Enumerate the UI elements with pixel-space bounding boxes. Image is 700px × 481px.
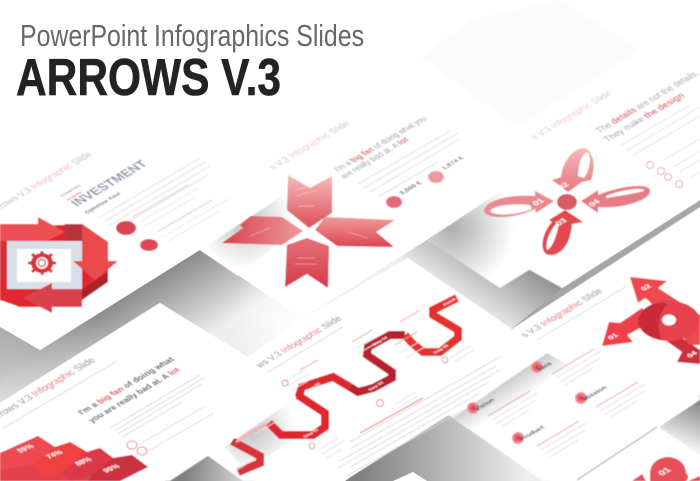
panel: investment slide bbox=[0, 95, 285, 350]
facet 74 bbox=[33, 442, 87, 478]
item: product: Product bbox=[518, 424, 547, 442]
step icons bbox=[282, 357, 448, 449]
panel: bottom right slide bbox=[575, 426, 700, 481]
ribbon: upper wave bbox=[405, 298, 458, 352]
statement text bbox=[331, 114, 429, 180]
step labels: Finish bbox=[442, 297, 458, 307]
background: thin shadow strip between slides bbox=[510, 200, 700, 330]
item: product bbox=[512, 421, 586, 457]
investment heading: Investment bbox=[59, 183, 82, 198]
bottom arrow bbox=[23, 283, 82, 313]
arrow 04 bbox=[640, 306, 700, 364]
statement text: are really bad at. A lot bbox=[337, 135, 412, 180]
investment heading: INVESTMENT bbox=[67, 158, 151, 209]
statement text: you are really bad at. A lot bbox=[85, 365, 183, 424]
percent labels: 59% bbox=[15, 442, 36, 454]
icon circle 2 bbox=[140, 239, 158, 251]
cast shadow on slide bbox=[200, 194, 300, 276]
inner frame bbox=[7, 241, 82, 289]
percent labels: 74% bbox=[44, 448, 65, 460]
facet 88 bbox=[62, 448, 113, 481]
investment heading: Optimize Your bbox=[84, 191, 124, 215]
icon: gear bbox=[28, 251, 56, 275]
ribbon: middle wave bbox=[350, 335, 405, 392]
detail lines bbox=[133, 185, 212, 232]
bottom red heading bbox=[360, 398, 423, 433]
panel: bottom centre slide corner bbox=[393, 472, 427, 481]
arrow 01 bbox=[602, 308, 660, 346]
percent arrow chart bbox=[0, 436, 148, 481]
curved arrow 04 bbox=[581, 186, 650, 213]
subtitle heading: ARROWS V.3 bbox=[16, 49, 281, 107]
band bbox=[0, 224, 108, 307]
stat 1 bbox=[386, 180, 424, 208]
bottom paragraph lines bbox=[338, 357, 500, 477]
arrow hole bbox=[662, 314, 676, 326]
ribbon arrow right bbox=[315, 217, 395, 247]
red arrow fragments bbox=[632, 474, 646, 481]
bullet icons bbox=[646, 162, 682, 188]
left arrow bbox=[0, 241, 17, 282]
background: shadow channel centre right bbox=[300, 213, 562, 335]
background: bottom left shadow bbox=[165, 452, 256, 481]
right arrow bbox=[73, 224, 118, 280]
body copy lines bbox=[100, 158, 210, 229]
arrow centre swirl bbox=[638, 301, 700, 341]
curved arrow 02 bbox=[552, 148, 594, 192]
cast shadow on slide bbox=[453, 353, 580, 438]
red arrow fragment right bbox=[688, 476, 700, 481]
panel: percentage slide bbox=[0, 303, 297, 481]
step captions bbox=[250, 337, 474, 458]
inner panel bbox=[17, 249, 71, 282]
body copy lines bbox=[110, 375, 204, 437]
statement text: I'm a big fan of doing what you bbox=[331, 114, 429, 173]
slide subtitle line bbox=[537, 286, 627, 340]
background: right shadow bbox=[650, 394, 700, 458]
panel: curved arrows slide bbox=[400, 17, 700, 288]
slide heading: ws V.3 Infographic Slide bbox=[253, 315, 345, 370]
item: vision: Vision bbox=[473, 398, 496, 412]
arrow labels: 04 bbox=[685, 349, 700, 359]
step labels bbox=[235, 297, 458, 471]
slide heading: s V.3 Infographic Slide bbox=[519, 287, 606, 340]
ribbon: thin link bbox=[236, 423, 269, 442]
cast shadow on slide bbox=[225, 397, 310, 470]
body copy lines bbox=[620, 105, 700, 178]
facet 90 bbox=[88, 455, 148, 481]
subtitle line bbox=[2, 361, 117, 429]
item: idea: Idea bbox=[536, 361, 554, 372]
statement text: I'm a big fan of doing what bbox=[75, 355, 177, 416]
slide heading: s V.3 Infographic Slide bbox=[267, 120, 353, 172]
stat 2 bbox=[428, 155, 466, 183]
step labels: Step 04 bbox=[371, 335, 389, 347]
curved arrow 03: 03 bbox=[553, 216, 569, 227]
title bbox=[16, 18, 364, 107]
curved arrow 02: 02 bbox=[555, 180, 571, 191]
arrow 02 bbox=[630, 277, 700, 345]
ribbon arrow bottom bbox=[285, 238, 329, 288]
checklist lines bbox=[138, 407, 214, 451]
background: faint gap between top slides bbox=[420, 0, 640, 127]
ribbon: start section bbox=[232, 441, 260, 472]
red captions bbox=[272, 310, 420, 411]
body copy lines bbox=[358, 131, 458, 197]
curved arrow 01: 01 bbox=[530, 196, 546, 207]
investment heading: Analysis bbox=[65, 190, 83, 202]
octagon arrows diagram bbox=[0, 217, 118, 313]
title line: PowerPoint Infographics Slides bbox=[20, 18, 364, 53]
ribbon: lower wave bbox=[269, 377, 350, 435]
panel: steps slide bbox=[155, 258, 547, 481]
curved arrow 03 bbox=[542, 210, 583, 255]
cast shadow on slide bbox=[427, 185, 545, 288]
step labels: Start bbox=[235, 462, 248, 471]
stat 1: 3,000 € bbox=[398, 180, 424, 196]
slide heading: s V.3 Infographic Slide bbox=[529, 90, 615, 142]
step labels: Step 05 bbox=[432, 343, 450, 355]
step labels: Step 02 bbox=[304, 381, 322, 393]
item: mission: Mission bbox=[581, 385, 609, 402]
curved arrow 01 bbox=[484, 191, 554, 217]
lower right fold bbox=[82, 272, 108, 300]
item: vision bbox=[467, 391, 537, 427]
curved arrow 04: 04 bbox=[586, 197, 602, 208]
ribbon arrow top bbox=[287, 175, 332, 228]
check icons bbox=[127, 441, 147, 455]
panel: cross arrows slide bbox=[165, 57, 553, 318]
item: mission bbox=[575, 382, 645, 418]
stat 2: 1,874 € bbox=[440, 155, 466, 171]
percent labels bbox=[15, 442, 122, 474]
icon circle 1 bbox=[116, 221, 136, 235]
ribbon arrow left bbox=[222, 216, 303, 245]
slide edge shadow bbox=[577, 427, 657, 480]
facet base bbox=[0, 436, 148, 481]
percent labels: 90% bbox=[101, 462, 122, 474]
top arrow bbox=[0, 217, 65, 245]
step labels: Step 03 bbox=[367, 380, 385, 392]
percent labels: 88% bbox=[73, 455, 94, 467]
subtitle line bbox=[268, 327, 343, 372]
step labels: Step 01 bbox=[302, 427, 320, 439]
background: bottom centre shadow bbox=[345, 412, 550, 481]
arrow labels: 02 bbox=[639, 283, 653, 292]
panel: vision mission slide bbox=[430, 207, 700, 481]
arrow labels: 01 bbox=[606, 332, 620, 341]
right arrow head overlap bbox=[73, 261, 118, 280]
facet 59 bbox=[0, 436, 55, 470]
numbered circle: 01 bbox=[655, 466, 673, 477]
item: idea bbox=[531, 349, 601, 385]
centre hub bbox=[557, 194, 577, 210]
upper right fold bbox=[65, 224, 82, 241]
investment heading bbox=[59, 158, 151, 215]
arrow labels bbox=[606, 283, 700, 359]
statement text: They make the design bbox=[602, 92, 688, 144]
arrow captions bbox=[250, 185, 368, 264]
background: shadow channel under top-left slides bbox=[0, 250, 302, 403]
